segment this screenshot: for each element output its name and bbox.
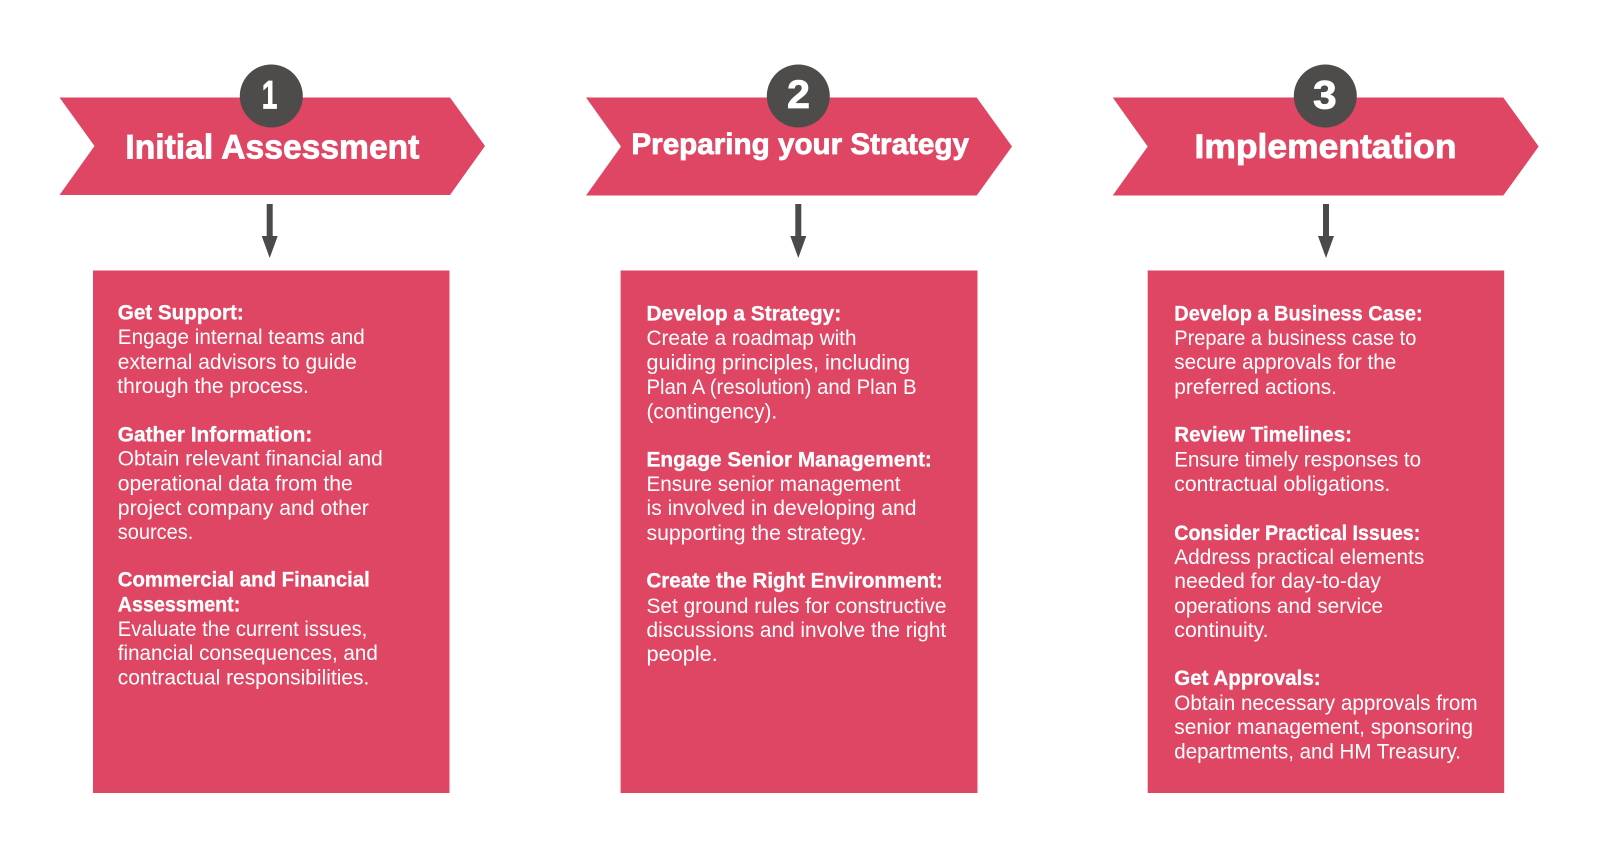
text block: Consider Practical Issues: Address practical elements xyxy=(1174,546,1424,569)
text block: Consider Practical Issues xyxy=(1174,522,1424,642)
text block: Develop a Business Case: preferred actions. xyxy=(1174,376,1337,399)
icon: number 1 badge xyxy=(240,64,303,128)
text block: Develop a Business Case xyxy=(1174,303,1423,399)
text block: Develop a Strategy: Create a roadmap with xyxy=(646,327,856,350)
text block: Consider Practical Issues: needed for day-to-day xyxy=(1174,570,1382,593)
icon: number 2 badge: 2 xyxy=(787,73,810,117)
text block: Get Support xyxy=(117,301,365,398)
text block: Create the Right Environment: people. xyxy=(646,643,718,666)
text block: Commercial and Financial Assessment: Commercial and Financial xyxy=(118,569,370,592)
text block: Review Timelines: Review Timelines: xyxy=(1174,424,1352,447)
panel: step 1 Initial Assessment xyxy=(60,64,485,793)
icon: number 3 badge xyxy=(1294,64,1357,128)
text block: Consider Practical Issues: operations and service xyxy=(1174,595,1383,618)
text block: Gather Information: Gather Information: xyxy=(118,424,312,447)
text block: Commercial and Financial Assessment: Evaluate the current issues, xyxy=(118,618,367,641)
panel: step 3 content box xyxy=(1148,270,1504,793)
text block: Consider Practical Issues: Consider Practical Issues: xyxy=(1174,522,1420,545)
text block: Gather Information: Obtain relevant financial and xyxy=(118,448,383,471)
arrow: step 2 down xyxy=(790,204,806,258)
text block: Create the Right Environment: Create the Right Environment: xyxy=(646,570,943,593)
text block: Engage Senior Management: supporting the strategy. xyxy=(646,522,866,545)
banner: step 3 chevron xyxy=(1113,98,1539,196)
text block: Gather Information xyxy=(118,424,383,544)
banner: step 2 chevron xyxy=(586,98,1012,196)
text block: Develop a Strategy: guiding principles, including xyxy=(646,351,910,374)
text block: Commercial and Financial Assessment xyxy=(118,569,378,690)
icon: number 2 badge xyxy=(767,64,830,128)
text block: Commercial and Financial Assessment: contractual responsibilities. xyxy=(118,667,369,690)
text block: Get Approvals: Obtain necessary approvals from xyxy=(1174,692,1478,715)
text block: Commercial and Financial Assessment: financial consequences, and xyxy=(118,642,378,665)
text block: Get Support: Get Support: xyxy=(118,301,244,324)
text block: Get Support: through the process. xyxy=(117,375,309,398)
text block: Develop a Business Case: Develop a Business Case: xyxy=(1174,303,1423,326)
text block: Get Support: Engage internal teams and xyxy=(118,326,365,349)
banner: step 1 chevron xyxy=(60,98,485,195)
text block: Review Timelines: contractual obligations. xyxy=(1174,473,1390,496)
heading: Preparing your Strategy: Preparing your Strategy xyxy=(631,128,969,161)
text block: Develop a Strategy xyxy=(646,303,916,423)
text block: Commercial and Financial Assessment: Assessment: xyxy=(118,594,240,617)
text block: Gather Information: project company and other xyxy=(118,497,369,520)
panel: step 2 Preparing your Strategy xyxy=(586,64,1012,793)
icon: number 1 badge: 1 xyxy=(262,73,277,117)
text block: Develop a Business Case: Prepare a business case to xyxy=(1174,327,1416,350)
text block: Gather Information: sources. xyxy=(118,521,193,544)
panel: step 1 content box xyxy=(93,270,450,793)
text block: Engage Senior Management xyxy=(646,449,932,545)
text block: Develop a Business Case: secure approvals for the xyxy=(1174,351,1396,374)
text block: Review Timelines xyxy=(1174,424,1421,496)
text block: Review Timelines: Ensure timely responses to xyxy=(1174,449,1421,472)
text block: Create the Right Environment: Set ground rules for constructive xyxy=(646,595,946,618)
heading: Implementation: Implementation xyxy=(1194,128,1456,166)
text block: Create the Right Environment xyxy=(646,570,946,666)
text block: Develop a Strategy: (contingency). xyxy=(646,400,777,423)
text block: Gather Information: operational data from the xyxy=(118,472,353,495)
arrow: step 3 down xyxy=(1318,204,1334,258)
heading: Initial Assessment: Initial Assessment xyxy=(125,128,419,166)
panel: step 3 Implementation xyxy=(1113,64,1539,793)
icon: number 3 badge: 3 xyxy=(1313,73,1337,117)
text block: Get Approvals xyxy=(1174,667,1478,763)
text block: Get Approvals: Get Approvals: xyxy=(1174,667,1321,690)
text block: Engage Senior Management: is involved in developing and xyxy=(646,497,916,520)
text block: Get Support: external advisors to guide xyxy=(118,351,357,374)
text block: Consider Practical Issues: continuity. xyxy=(1174,619,1269,642)
text block: Develop a Strategy: Plan A (resolution) and Plan B xyxy=(646,376,916,399)
text block: Develop a Strategy: Develop a Strategy: xyxy=(646,303,841,326)
text block: Get Approvals: senior management, sponsoring xyxy=(1174,716,1473,739)
panel: step 2 content box xyxy=(621,270,978,793)
text block: Get Approvals: departments, and HM Treasury. xyxy=(1174,740,1461,763)
arrow: step 1 down xyxy=(262,204,278,258)
text block: Engage Senior Management: Engage Senior Management: xyxy=(646,449,932,472)
text block: Engage Senior Management: Ensure senior management xyxy=(646,473,901,496)
text block: Create the Right Environment: discussions and involve the right xyxy=(646,619,946,642)
